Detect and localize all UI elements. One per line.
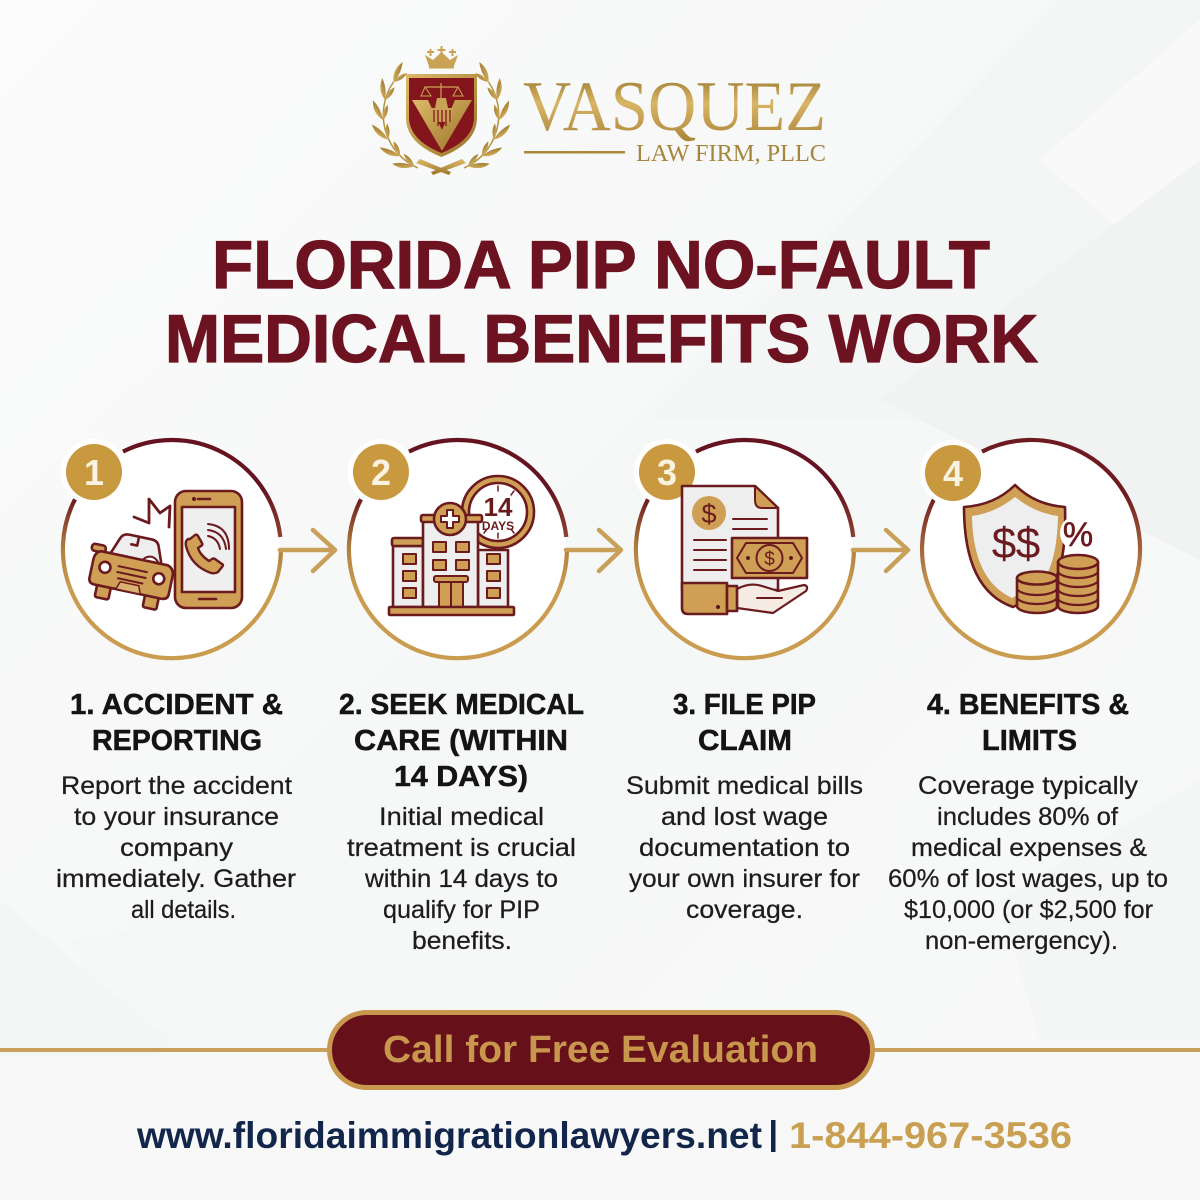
step 3 text: Submit medical bills — [626, 772, 863, 800]
right coins — [1058, 555, 1098, 613]
badge 2 — [348, 439, 414, 505]
badge 4: 4 — [943, 453, 963, 494]
step 4 text: $10,000 (or $2,500 for — [904, 896, 1153, 924]
icon: car crash and phone — [82, 491, 242, 612]
left coins — [1017, 572, 1057, 613]
step 2 heading — [339, 689, 584, 793]
step 3 text: coverage. — [686, 896, 803, 924]
contact line: 1-844-967-3536 — [789, 1115, 1072, 1156]
hospital wings — [393, 546, 423, 607]
step 4 text: 60% of lost wages, up to — [888, 865, 1168, 893]
contact line: www.floridaimmigrationlawyers.net — [136, 1115, 762, 1156]
logo crown — [425, 46, 458, 68]
step 4 text — [888, 772, 1168, 955]
clock: 14 — [484, 492, 513, 522]
step 4 ring — [922, 440, 1140, 658]
logo: Vasquez Law Firm — [370, 46, 826, 175]
title — [165, 227, 1038, 377]
step 3 text: and lost wage — [661, 803, 828, 831]
badge 1 — [61, 439, 127, 505]
step 2 text: within 14 days to — [364, 865, 558, 893]
icon: claim document, bill and hand: $ — [701, 499, 717, 529]
door — [439, 582, 463, 607]
step 1 ring and arrow — [63, 440, 335, 658]
percent — [1060, 515, 1096, 551]
logo wordmark: LAW FIRM, PLLC — [636, 141, 826, 167]
badge 1: 1 — [84, 452, 104, 493]
document — [682, 486, 778, 590]
dollars — [992, 519, 1040, 568]
step 3 ring and arrow — [636, 440, 908, 658]
icon: claim document, bill and hand: $ — [764, 549, 775, 570]
step 2 ring and arrow — [349, 440, 621, 658]
step 1 text: to your insurance — [74, 803, 279, 831]
icon: shield, coins and percent: % — [1063, 516, 1093, 554]
phone — [175, 491, 242, 608]
step 3 heading: CLAIM — [698, 725, 792, 757]
step 1 text: all details. — [131, 896, 236, 924]
badge 3: 3 — [657, 452, 677, 493]
call to action band — [0, 1012, 1200, 1088]
step 1 text: immediately. Gather — [56, 865, 296, 893]
step 3 text: documentation to — [639, 834, 850, 862]
step 3 heading: 3. FILE PIP — [673, 689, 816, 721]
step 2 text: qualify for PIP — [383, 896, 540, 924]
step 3 text — [626, 772, 863, 924]
step 4 text: medical expenses & — [911, 834, 1147, 862]
badge 3 — [634, 439, 700, 505]
car — [82, 528, 179, 612]
dollar coin — [692, 496, 726, 530]
windows — [403, 542, 500, 598]
step 2 heading: 14 DAYS) — [394, 761, 528, 793]
step 2 text: Initial medical — [379, 803, 544, 831]
step 4 text: non-emergency). — [925, 927, 1118, 955]
step 1 text: Report the accident — [61, 772, 292, 800]
step 1 heading — [70, 689, 283, 757]
bill — [732, 538, 807, 578]
step 1 heading: 1. ACCIDENT & — [70, 689, 283, 721]
step 2 text: treatment is crucial — [347, 834, 576, 862]
hospital centre — [423, 520, 478, 607]
clock — [462, 476, 534, 548]
step 2 heading: 2. SEEK MEDICAL — [339, 689, 584, 721]
step 4 text: includes 80% of — [937, 803, 1118, 831]
logo wreath — [370, 61, 512, 175]
crash burst — [134, 499, 170, 527]
icon: hospital and 14 days clock — [389, 476, 534, 615]
step 2 text — [347, 803, 576, 955]
step 1 text: company — [120, 834, 234, 862]
base — [389, 607, 514, 615]
shield — [964, 485, 1065, 607]
hand — [737, 585, 807, 613]
step 4 text: Coverage typically — [918, 772, 1139, 800]
title: FLORIDA PIP NO-FAULT — [212, 227, 990, 303]
step 4 heading: 4. BENEFITS & — [927, 689, 1129, 721]
dollars: $ — [992, 519, 1016, 568]
dollars: $ — [1016, 519, 1040, 568]
badge 2: 2 — [371, 452, 391, 493]
icon: claim document, bill and hand — [682, 486, 807, 614]
step 2 text: benefits. — [412, 927, 512, 955]
step 3 text: your own insurer for — [629, 865, 860, 893]
step 1 heading: REPORTING — [92, 725, 262, 757]
cuff — [682, 583, 727, 614]
step 4 heading: LIMITS — [982, 725, 1077, 757]
title: MEDICAL BENEFITS WORK — [165, 301, 1038, 377]
call to action band: Call for Free Evaluation — [383, 1029, 818, 1071]
step 1 text — [56, 772, 296, 924]
step 3 heading — [673, 689, 816, 757]
step 4 heading — [927, 689, 1129, 757]
clock: DAYS — [482, 519, 514, 533]
contact line — [136, 1115, 1072, 1156]
logo wordmark: VASQUEZ — [523, 68, 826, 146]
badge 4 — [920, 440, 986, 506]
logo shield — [406, 74, 477, 157]
icon: shield, coins and percent — [964, 485, 1098, 613]
step 2 heading: CARE (WITHIN — [354, 725, 568, 757]
